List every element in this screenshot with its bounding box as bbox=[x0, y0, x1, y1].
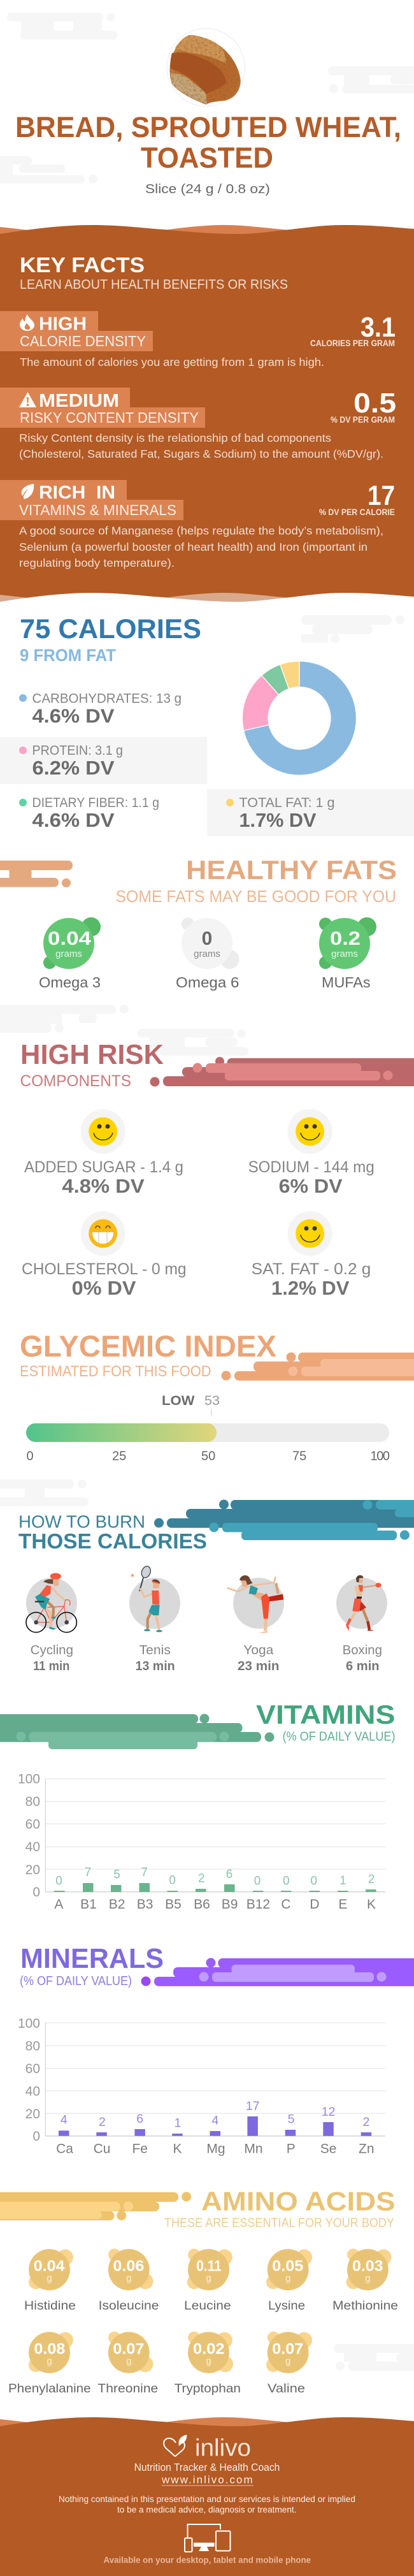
bar chart: vitamins: D bbox=[310, 1897, 320, 1912]
risky content badge: RISKY CONTENT DENSITY bbox=[20, 409, 199, 426]
item: sodium bbox=[248, 1109, 375, 1197]
bar chart: vitamins: 6 bbox=[226, 1868, 232, 1881]
bar chart: vitamins: 7 bbox=[85, 1866, 91, 1879]
bar chart: vitamins: 0 bbox=[283, 1875, 290, 1888]
activity: tennis: 13 min bbox=[136, 1659, 175, 1673]
legend: protein: 6.2% DV bbox=[32, 757, 115, 779]
high risk subheading: COMPONENTS bbox=[20, 1072, 131, 1090]
minerals banner bbox=[141, 1958, 414, 1986]
risky content value: % DV PER GRAM bbox=[331, 415, 395, 425]
panel: footer bbox=[0, 2417, 414, 2576]
bar chart: vitamins: B6 bbox=[194, 1897, 210, 1912]
bar chart: minerals: 100 bbox=[18, 2016, 40, 2031]
bar chart: minerals: 4 bbox=[211, 2114, 218, 2128]
calories from fat: 9 FROM FAT bbox=[20, 646, 116, 665]
risky content description: (Cholesterol, Saturated Fat, Sugars & Sodium) to the amount (%DV/gr). bbox=[19, 448, 383, 460]
panel: minerals bbox=[18, 1944, 414, 2157]
panel: healthy fats bbox=[0, 855, 397, 991]
logo: inlivo: inlivo bbox=[195, 2435, 251, 2462]
legend: carbohydrates: 4.6% DV bbox=[32, 705, 115, 727]
item: cholesterol bbox=[22, 1211, 187, 1299]
bar chart: vitamins: 80 bbox=[25, 1794, 40, 1809]
bar chart: minerals bbox=[18, 2016, 385, 2157]
glycemic scale: 100 bbox=[371, 1450, 390, 1464]
bar chart: minerals: Fe bbox=[132, 2142, 148, 2157]
key facts heading: KEY FACTS bbox=[20, 253, 145, 277]
bar chart: vitamins: 40 bbox=[25, 1840, 40, 1854]
bar chart: vitamins: 0 bbox=[169, 1874, 176, 1888]
amino: histidine bbox=[24, 2249, 76, 2313]
bar chart: vitamins: 5 bbox=[113, 1868, 120, 1882]
activity: boxing bbox=[336, 1575, 387, 1673]
disclaimer: Nothing contained in this presentation and our services is intended or implied bbox=[59, 2494, 355, 2504]
bar chart: minerals: 4 bbox=[61, 2113, 68, 2127]
amino: lysine bbox=[266, 2249, 312, 2313]
icon: devices bbox=[185, 2524, 231, 2552]
healthy fats heading: HEALTHY FATS bbox=[186, 855, 397, 885]
bar chart: vitamins: C bbox=[281, 1897, 291, 1912]
amino: isoleucine: 0.06 bbox=[113, 2258, 144, 2275]
bar chart: minerals: 17 bbox=[246, 2099, 260, 2113]
bar chart: vitamins: B5 bbox=[165, 1897, 182, 1912]
calorie density description: The amount of calories you are getting from 1 gram is high. bbox=[20, 356, 324, 368]
glycemic value: LOW bbox=[162, 1394, 195, 1408]
bar chart: vitamins: 2 bbox=[368, 1873, 375, 1886]
item: saturated fat: 1.2% DV bbox=[271, 1277, 350, 1299]
risky content value: 0.5 bbox=[353, 388, 396, 419]
omega 3 bubble: grams bbox=[55, 949, 82, 959]
amino: valine: g bbox=[285, 2356, 290, 2367]
bar chart: minerals: 0 bbox=[32, 2129, 40, 2144]
vitamins subheading: (% OF DAILY VALUE) bbox=[283, 1730, 395, 1744]
donut chart bbox=[242, 661, 356, 775]
glycemic scale: 0 bbox=[27, 1450, 34, 1464]
omega 6 bubble: Omega 6 bbox=[176, 974, 239, 991]
icon: leaf bbox=[22, 484, 34, 499]
glycemic scale: 50 bbox=[201, 1450, 215, 1464]
panel: vitamins bbox=[0, 1699, 395, 1912]
mufas bubble: 0.2 bbox=[330, 928, 360, 949]
bar chart: vitamins: B3 bbox=[137, 1897, 153, 1912]
bar chart: minerals: 60 bbox=[25, 2062, 40, 2076]
bar chart: minerals: Se bbox=[320, 2142, 336, 2157]
bar chart: minerals: Mg bbox=[206, 2142, 225, 2157]
risky content description bbox=[19, 432, 383, 460]
vitamins and minerals description: A good source of Manganese (helps regulate the body’s metabolism), bbox=[19, 524, 383, 537]
vitamins and minerals badge: RICH IN bbox=[39, 483, 115, 503]
bar chart: vitamins: B12 bbox=[246, 1897, 270, 1912]
amino: phenylalanine: Phenylalanine bbox=[8, 2382, 91, 2396]
burn heading: THOSE CALORIES bbox=[18, 1529, 207, 1553]
glycemic value: 53 bbox=[204, 1394, 220, 1408]
item: added sugar: ADDED SUGAR - 1.4 g bbox=[24, 1158, 183, 1176]
bar chart: vitamins: B9 bbox=[222, 1897, 238, 1912]
bar chart: vitamins: 20 bbox=[25, 1863, 40, 1877]
bar chart: vitamins: 2 bbox=[198, 1872, 205, 1886]
vitamins and minerals value: 17 bbox=[368, 480, 395, 511]
glycemic subheading: ESTIMATED FOR THIS FOOD bbox=[20, 1363, 211, 1380]
legend: protein: PROTEIN: 3.1 g bbox=[32, 743, 123, 758]
item: saturated fat: SAT. FAT - 0.2 g bbox=[252, 1260, 371, 1278]
bar chart: minerals: 40 bbox=[25, 2085, 40, 2099]
amino: leucine: g bbox=[206, 2273, 211, 2284]
amino: leucine: 0.11 bbox=[196, 2258, 222, 2275]
item: cholesterol: CHOLESTEROL - 0 mg bbox=[22, 1260, 187, 1278]
bar chart: minerals: K bbox=[173, 2142, 182, 2157]
bar chart: minerals: 6 bbox=[136, 2112, 143, 2126]
item: added sugar: 4.8% DV bbox=[62, 1175, 145, 1197]
glycemic value bbox=[162, 1394, 220, 1416]
bar chart: vitamins: 7 bbox=[141, 1866, 148, 1879]
item: added sugar bbox=[24, 1109, 183, 1197]
calories heading: 75 CALORIES bbox=[20, 614, 201, 644]
amino: leucine: Leucine bbox=[184, 2299, 231, 2313]
bar chart: vitamins: A bbox=[54, 1897, 63, 1912]
legend: dietary fiber bbox=[19, 796, 159, 831]
burn heading bbox=[18, 1512, 207, 1553]
omega 6 bubble bbox=[176, 918, 239, 991]
amino: valine: Valine bbox=[268, 2382, 305, 2396]
title: TOASTED bbox=[141, 142, 273, 174]
vitamins and minerals value bbox=[319, 480, 395, 517]
amino: tryptophan: 0.02 bbox=[193, 2341, 224, 2358]
risky content description: Risky Content density is the relationship of bad components bbox=[19, 432, 331, 444]
risky content badge bbox=[0, 388, 205, 428]
burn banner bbox=[154, 1499, 414, 1540]
bar chart: minerals: P bbox=[287, 2142, 296, 2157]
vitamins and minerals value: % DV PER CALORIE bbox=[319, 507, 395, 517]
amino: tryptophan: Tryptophan bbox=[175, 2382, 241, 2396]
amino: histidine: g bbox=[46, 2273, 52, 2284]
legend: dietary fiber: DIETARY FIBER: 1.1 g bbox=[32, 796, 159, 810]
legend: carbohydrates bbox=[19, 691, 182, 727]
vitamins heading: VITAMINS bbox=[256, 1699, 395, 1729]
omega 3 bubble: 0.04 bbox=[48, 928, 91, 949]
logo: inlivo bbox=[164, 2434, 251, 2462]
amino: leucine bbox=[184, 2249, 232, 2313]
glycemic scale: 25 bbox=[112, 1450, 126, 1464]
minerals heading: MINERALS bbox=[20, 1944, 164, 1974]
glycemic banner bbox=[222, 1353, 414, 1381]
panel: how to burn those calories bbox=[18, 1499, 414, 1673]
disclaimer bbox=[59, 2494, 355, 2515]
bar chart: vitamins: 1 bbox=[339, 1874, 346, 1888]
panel: amino acids bbox=[0, 2187, 414, 2396]
header decorative clouds bbox=[0, 13, 414, 184]
calorie density value: CALORIES PER GRAM bbox=[310, 338, 395, 348]
icon: bread photo bbox=[167, 29, 245, 106]
amino: isoleucine: g bbox=[126, 2273, 131, 2284]
legend: total fat: 1.7% DV bbox=[239, 809, 317, 831]
panel: glycemic index bbox=[20, 1329, 414, 1464]
activity: boxing: Boxing bbox=[343, 1643, 382, 1657]
legend: total fat: TOTAL FAT: 1 g bbox=[239, 796, 335, 810]
omega 3 bubble: Omega 3 bbox=[39, 974, 101, 991]
mufas bubble: MUFAs bbox=[322, 974, 371, 991]
healthy fats subheading: SOME FATS MAY BE GOOD FOR YOU bbox=[116, 887, 396, 906]
bar chart: minerals: 1 bbox=[175, 2116, 181, 2130]
bar chart: vitamins: 60 bbox=[25, 1817, 40, 1832]
omega 6 bubble: 0 bbox=[202, 928, 212, 949]
vitamins banner bbox=[0, 1714, 274, 1749]
item: saturated fat bbox=[252, 1211, 371, 1299]
amino: histidine: Histidine bbox=[24, 2299, 76, 2313]
bar chart: minerals: 2 bbox=[363, 2115, 369, 2129]
amino heading: AMINO ACIDS bbox=[201, 2187, 395, 2216]
amino: threonine: g bbox=[126, 2356, 131, 2367]
activity: yoga: Yoga bbox=[243, 1643, 274, 1657]
bar chart: vitamins: 0 bbox=[254, 1875, 261, 1888]
bar chart: vitamins: 100 bbox=[18, 1772, 40, 1787]
tagline: Nutrition Tracker & Health Coach bbox=[134, 2461, 280, 2473]
legend: total fat bbox=[207, 789, 414, 836]
item: sodium: 6% DV bbox=[279, 1175, 343, 1197]
panel: key facts bbox=[0, 225, 414, 607]
calorie density badge: HIGH bbox=[39, 314, 87, 334]
vitamins and minerals badge bbox=[0, 480, 183, 520]
vitamins and minerals description: Selenium (a powerful booster of heart health) and Iron (important in bbox=[19, 541, 368, 553]
amino: methionine: g bbox=[365, 2273, 371, 2284]
amino: isoleucine bbox=[99, 2249, 159, 2313]
activity: cycling bbox=[26, 1573, 77, 1673]
amino: methionine: 0.03 bbox=[352, 2258, 383, 2275]
amino: lysine: 0.05 bbox=[272, 2258, 303, 2275]
icon: warning triangle bbox=[19, 392, 36, 407]
bar chart: vitamins: B2 bbox=[109, 1897, 125, 1912]
bar chart: minerals: 5 bbox=[288, 2113, 295, 2127]
website: www.inlivo.com bbox=[161, 2473, 253, 2486]
amino: methionine: Methionine bbox=[332, 2299, 398, 2313]
bar chart: minerals: 2 bbox=[99, 2115, 106, 2129]
vitamins and minerals description: regulating body temperature). bbox=[19, 557, 175, 569]
bar chart: vitamins: K bbox=[367, 1897, 376, 1912]
amino: valine bbox=[266, 2332, 312, 2396]
bar chart: vitamins: B1 bbox=[80, 1897, 97, 1912]
activity: yoga: 23 min bbox=[238, 1659, 279, 1673]
bar chart: minerals: Cu bbox=[94, 2142, 110, 2157]
amino: threonine: 0.07 bbox=[113, 2341, 144, 2358]
title: BREAD, SPROUTED WHEAT, bbox=[15, 111, 401, 143]
bar chart: vitamins bbox=[18, 1772, 385, 1912]
calorie density value bbox=[310, 312, 396, 348]
high risk banner bbox=[150, 1057, 414, 1086]
legend: dietary fiber: 4.6% DV bbox=[32, 809, 115, 831]
activity: tennis bbox=[129, 1565, 180, 1673]
amino: tryptophan: g bbox=[206, 2356, 211, 2367]
amino: phenylalanine bbox=[8, 2332, 91, 2396]
burn heading: HOW TO BURN bbox=[18, 1512, 145, 1532]
activity: cycling: 11 min bbox=[33, 1659, 69, 1673]
mufas bubble bbox=[319, 917, 376, 991]
glycemic gauge bbox=[26, 1423, 389, 1442]
vitamins and minerals badge: VITAMINS & MINERALS bbox=[19, 502, 176, 518]
bar chart: minerals: Zn bbox=[359, 2142, 375, 2157]
amino banner bbox=[0, 2192, 191, 2220]
risky content badge: MEDIUM bbox=[39, 391, 119, 411]
amino: threonine: Threonine bbox=[97, 2382, 158, 2396]
bar chart: vitamins: 0 bbox=[55, 1875, 62, 1888]
bar chart: vitamins: 0 bbox=[311, 1875, 317, 1888]
item: sodium: SODIUM - 144 mg bbox=[248, 1158, 375, 1176]
legend: protein bbox=[0, 737, 207, 784]
omega 6 bubble: grams bbox=[194, 949, 220, 959]
minerals subheading: (% OF DAILY VALUE) bbox=[20, 1974, 132, 1988]
bar chart: minerals: Ca bbox=[56, 2142, 73, 2157]
key facts subheading: LEARN ABOUT HEALTH BENEFITS OR RISKS bbox=[20, 277, 288, 292]
amino: isoleucine: Isoleucine bbox=[99, 2299, 159, 2313]
panel: high risk components bbox=[20, 1040, 414, 1299]
legend: carbohydrates: CARBOHYDRATES: 13 g bbox=[32, 691, 182, 706]
calorie density value: 3.1 bbox=[360, 312, 396, 343]
disclaimer: to be a medical advice, diagnosis or treatment. bbox=[117, 2505, 297, 2515]
mufas bubble: grams bbox=[331, 949, 358, 959]
amino subheading: THESE ARE ESSENTIAL FOR YOUR BODY bbox=[164, 2216, 394, 2230]
title bbox=[15, 111, 401, 174]
high risk heading: HIGH RISK bbox=[20, 1040, 164, 1070]
panel: calories bbox=[0, 614, 414, 836]
activity: tennis: Tenis bbox=[139, 1643, 171, 1657]
glycemic scale: 75 bbox=[292, 1450, 306, 1464]
amino: phenylalanine: 0.08 bbox=[34, 2341, 65, 2358]
vitamins and minerals description bbox=[19, 524, 383, 569]
amino: lysine: Lysine bbox=[268, 2299, 305, 2313]
risky content value bbox=[331, 388, 396, 425]
calorie density badge: CALORIE DENSITY bbox=[20, 333, 146, 349]
item: cholesterol: 0% DV bbox=[72, 1277, 136, 1299]
availability note: Available on your desktop, tablet and mobile phone bbox=[103, 2555, 311, 2565]
amino: tryptophan bbox=[175, 2332, 241, 2396]
activity: cycling: Cycling bbox=[31, 1643, 73, 1657]
activity: boxing: 6 min bbox=[346, 1659, 380, 1673]
bar chart: minerals: Mn bbox=[244, 2142, 263, 2157]
amino: histidine: 0.04 bbox=[34, 2258, 65, 2275]
bar chart: vitamins: E bbox=[338, 1897, 347, 1912]
amino: valine: 0.07 bbox=[272, 2341, 303, 2358]
bar chart: minerals: 80 bbox=[25, 2039, 40, 2054]
amino: lysine: g bbox=[285, 2273, 290, 2284]
calorie density badge bbox=[0, 311, 153, 351]
bar chart: vitamins: 0 bbox=[32, 1885, 40, 1900]
omega 3 bubble bbox=[39, 917, 101, 991]
amino: threonine bbox=[97, 2332, 158, 2396]
glycemic scale bbox=[27, 1450, 390, 1464]
glycemic heading: GLYCEMIC INDEX bbox=[20, 1329, 276, 1363]
amino: methionine bbox=[332, 2249, 398, 2313]
icon: flame bbox=[20, 314, 34, 331]
bar chart: minerals: 20 bbox=[25, 2107, 40, 2121]
serving size: Slice (24 g / 0.8 oz) bbox=[145, 182, 270, 196]
amino: phenylalanine: g bbox=[46, 2356, 52, 2367]
bar chart: minerals: 12 bbox=[322, 2105, 335, 2119]
activity: yoga bbox=[227, 1575, 284, 1673]
